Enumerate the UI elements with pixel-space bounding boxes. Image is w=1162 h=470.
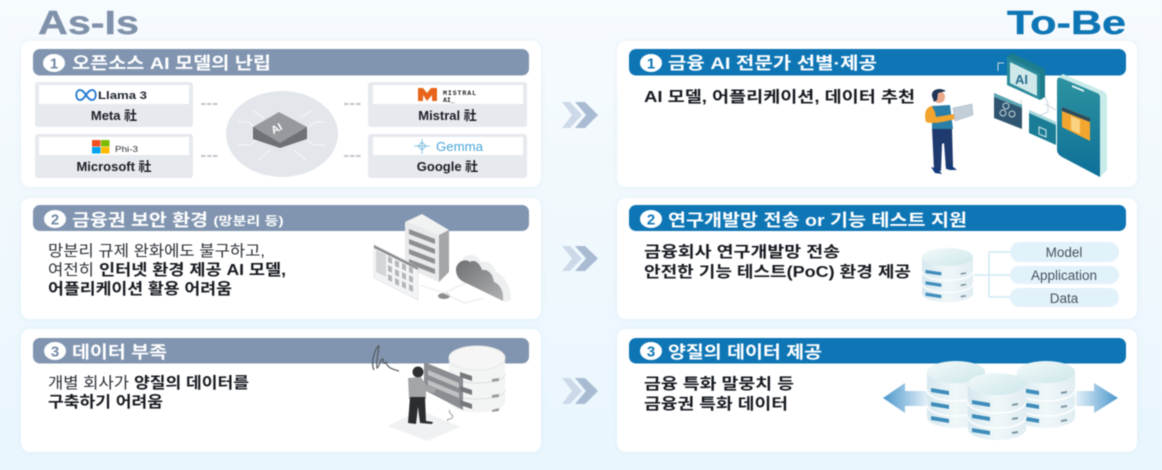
card: Mistral AI: MISTRAL <box>443 90 476 97</box>
text block: 인터넷 환경 제공 AI 모델, <box>99 261 286 279</box>
card: Microsoft Phi-3 <box>35 134 193 178</box>
heading bar <box>33 338 529 364</box>
icon: server and cloud <box>374 214 511 303</box>
card: Microsoft Phi-3: Phi-3 <box>115 144 138 154</box>
text block: 망분리 규제 완화에도 불구하고, <box>48 242 265 260</box>
icon: AI tiles and phone <box>994 53 1107 177</box>
text block <box>48 242 286 298</box>
list: Model Application Data <box>1010 242 1119 307</box>
heading bar: 연구개발망 전송 or 기능 테스트 지원 <box>668 211 967 230</box>
heading bar: 1 <box>50 56 58 72</box>
arrow: row 2 <box>562 246 598 271</box>
card: Meta Llama 3 <box>35 82 193 127</box>
heading bar <box>33 205 529 231</box>
title: To-Be: To-Be <box>1007 4 1126 41</box>
list: Model Application Data: Application <box>1031 268 1097 283</box>
panel: To-Be 1 financial AI experts <box>617 41 1137 187</box>
text block: 구축하기 어려움 <box>48 393 163 411</box>
card: Google Gemma: Gemma <box>436 139 484 154</box>
heading bar: 1 <box>647 56 655 72</box>
heading bar: 오픈소스 AI 모델의 난립 <box>72 54 271 73</box>
panel: To-Be 3 quality data <box>617 329 1137 452</box>
panel: To-Be 2 transfer or test <box>617 198 1137 319</box>
icon: database <box>922 248 973 302</box>
text block: 안전한 기능 테스트(PoC) 환경 제공 <box>644 263 911 281</box>
text block: 금융 특화 말뭉치 등 <box>644 375 794 393</box>
icon: databases with arrows <box>883 361 1118 440</box>
panel: As-Is 2 financial security <box>21 198 541 319</box>
panel: As-Is 1 open source AI models <box>21 41 541 187</box>
heading bar: 양질의 데이터 제공 <box>668 343 822 362</box>
heading bar <box>629 205 1126 231</box>
text block: 개별 회사가 <box>48 374 129 392</box>
heading bar: 금융권 보안 환경 <box>72 211 208 230</box>
heading bar <box>629 49 1126 76</box>
heading bar <box>33 49 529 76</box>
icon: person at database <box>373 346 505 441</box>
heading bar: 3 <box>647 344 655 360</box>
text block: 여전히 <box>48 261 94 279</box>
heading bar: 2 <box>51 212 59 228</box>
arrow: row 1 <box>562 102 598 128</box>
text block: 금융회사 연구개발망 전송 <box>644 243 840 261</box>
card: Microsoft Phi-3: Microsoft 社 <box>76 159 152 174</box>
text block <box>644 243 911 281</box>
heading bar: 금융 AI 전문가 선별·제공 <box>668 54 877 73</box>
card: Meta Llama 3: Llama 3 <box>98 90 147 102</box>
heading bar <box>629 338 1126 364</box>
text block <box>48 374 249 411</box>
text block: 어플리케이션 활용 어려움 <box>48 280 232 298</box>
heading bar: (망분리 등) <box>214 214 284 228</box>
heading bar: 2 <box>647 212 655 228</box>
heading bar: 데이터 부족 <box>72 343 167 362</box>
text block: 금융권 특화 데이터 <box>644 395 788 413</box>
text block <box>644 375 794 413</box>
text block: AI 모델, 어플리케이션, 데이터 추천 <box>644 88 915 106</box>
card: Meta Llama 3: Meta 社 <box>91 108 137 123</box>
panel: As-Is 3 lack of data <box>21 329 541 452</box>
icon: AI chip <box>226 91 338 177</box>
connector lines <box>974 252 1010 297</box>
icon: AI tiles and phone: AI <box>1015 72 1028 87</box>
list: Model Application Data: Model <box>1046 245 1082 260</box>
card: Google Gemma <box>368 134 527 178</box>
heading bar: 3 <box>51 344 59 360</box>
title: As-Is: As-Is <box>38 4 139 41</box>
list: Model Application Data: Data <box>1050 291 1079 306</box>
card: Mistral AI <box>368 82 527 127</box>
card: Google Gemma: Google 社 <box>417 159 478 174</box>
icon: person with laptop <box>925 89 973 174</box>
icon: AI chip: AI <box>269 121 284 137</box>
card: Mistral AI: Mistral 社 <box>418 108 477 123</box>
connector dots <box>201 103 360 157</box>
arrow: row 3 <box>562 378 598 404</box>
text block: 양질의 데이터를 <box>134 374 249 392</box>
card: Mistral AI: AI_ <box>443 97 455 104</box>
